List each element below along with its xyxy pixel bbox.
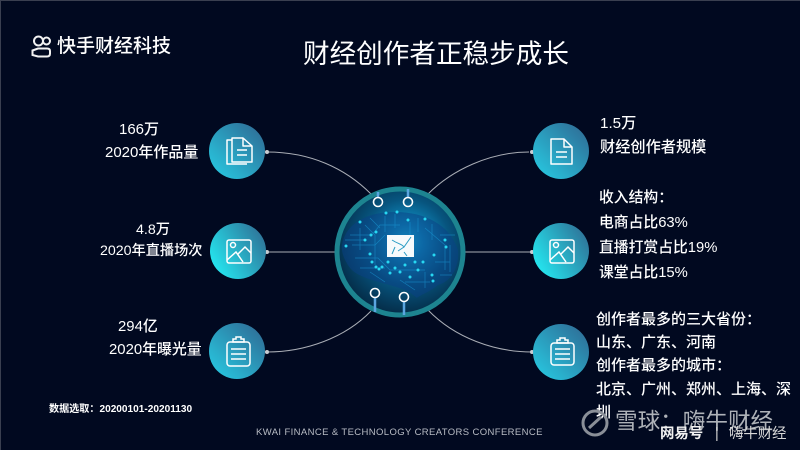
stat: provinces and cities bbox=[596, 311, 791, 421]
watermark: 网易号 bbox=[660, 426, 703, 442]
title: 财经创作者正稳步成长 bbox=[303, 39, 569, 69]
watermark: | bbox=[715, 426, 719, 442]
stat: exposure: 294亿 bbox=[118, 319, 158, 335]
data source note: 数据选取：20200101-20201130 bbox=[49, 404, 192, 415]
stat: creators scale bbox=[600, 115, 706, 156]
stat: works: 2020年作品量 bbox=[105, 144, 198, 161]
icon: clipboard, right bottom bbox=[533, 324, 589, 380]
stat: provinces and cities: 创作者最多的三大省份： bbox=[596, 311, 761, 328]
stat: income structure: 课堂占比15% bbox=[599, 265, 688, 281]
icon: document, right top bbox=[533, 123, 589, 179]
stat: income structure: 收入结构： bbox=[599, 190, 673, 206]
stat: creators scale: 1.5万 bbox=[600, 115, 636, 132]
stat: income structure bbox=[599, 189, 717, 281]
icon: clipboard, left bottom bbox=[209, 323, 265, 379]
stat: live sessions: 2020年直播场次 bbox=[100, 243, 202, 259]
brain circuit pattern bbox=[342, 210, 458, 298]
stat: income structure: 电商占比63% bbox=[599, 215, 688, 231]
watermark: 雪球：嗨牛财经 bbox=[615, 409, 773, 434]
stat: works bbox=[105, 121, 198, 161]
central brain circle bbox=[337, 189, 463, 315]
chip bbox=[387, 235, 414, 257]
stat: income structure: 直播打赏占比19% bbox=[599, 240, 717, 256]
watermark bbox=[582, 409, 787, 442]
stat: provinces and cities: 创作者最多的城市： bbox=[596, 357, 731, 374]
stat: provinces and cities: 圳 bbox=[596, 404, 611, 421]
stat: exposure: 2020年曝光量 bbox=[109, 342, 202, 358]
stat: provinces and cities: 山东、广东、河南 bbox=[596, 334, 716, 351]
connector lines bbox=[265, 150, 534, 354]
stat: live sessions: 4.8万 bbox=[136, 222, 170, 238]
stat: works: 166万 bbox=[119, 121, 159, 138]
stat: live sessions bbox=[100, 222, 202, 259]
icon: picture, right middle bbox=[533, 223, 589, 279]
logo icon bbox=[32, 36, 50, 56]
stat: creators scale: 财经创作者规模 bbox=[600, 139, 706, 156]
conference footer: KWAI FINANCE & TECHNOLOGY CREATORS CONFERENCE bbox=[256, 427, 543, 438]
node pins bbox=[370, 189, 412, 315]
logo text: 快手财经科技 bbox=[57, 36, 171, 57]
stat: provinces and cities: 北京、广州、郑州、上海、深 bbox=[596, 381, 791, 398]
stat: exposure bbox=[109, 318, 202, 358]
icon: picture, left middle bbox=[210, 223, 266, 279]
watermark: 嗨牛财经 bbox=[729, 426, 787, 442]
icon: documents, left top bbox=[209, 123, 265, 179]
